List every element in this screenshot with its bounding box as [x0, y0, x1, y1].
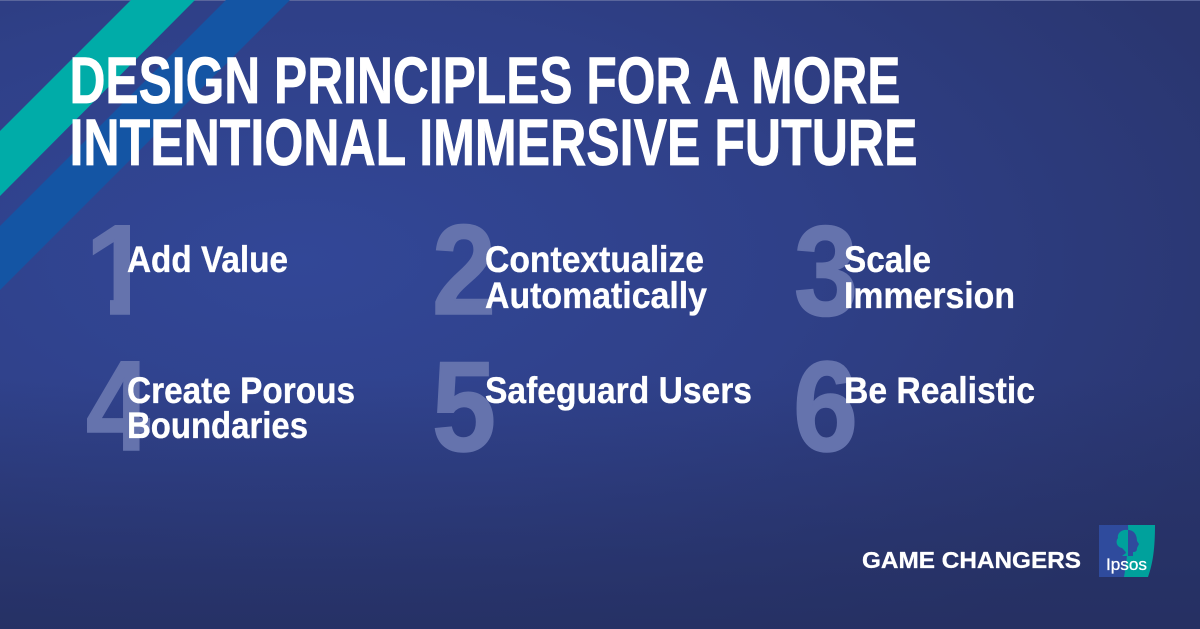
principle 6: Be Realistic	[793, 336, 1035, 479]
principle 1: Add Value: 1	[85, 199, 155, 342]
title	[70, 43, 918, 179]
principle 3: Scale Immersion: Scale	[844, 239, 931, 280]
title: DESIGN PRINCIPLES FOR A MORE	[70, 43, 900, 117]
principle 5: Safeguard Users	[432, 336, 752, 479]
principle 1: Add Value	[92, 225, 287, 315]
title: INTENTIONAL IMMERSIVE FUTURE	[70, 105, 918, 179]
principle 4: Create Porous Boundaries: Create Porous	[127, 370, 355, 411]
icon: Ipsos logo	[1099, 525, 1155, 577]
icon: Ipsos logo: Ipsos	[1106, 555, 1147, 574]
principle 2: Contextualize Automatically: Automatically	[485, 275, 707, 316]
principle 5: Safeguard Users: Safeguard Users	[485, 370, 752, 411]
principle 5: Safeguard Users: 5	[432, 336, 496, 479]
principle 4: Create Porous Boundaries: Boundaries	[127, 405, 308, 446]
principle 1: Add Value: Add Value	[127, 239, 288, 280]
principle 3: Scale Immersion	[794, 200, 1015, 343]
principle 2: Contextualize Automatically	[432, 199, 707, 342]
principle 4: Create Porous Boundaries	[86, 335, 355, 478]
principle 2: Contextualize Automatically: Contextualize	[485, 239, 704, 280]
principle 6: Be Realistic: 6	[793, 336, 858, 479]
principle 2: Contextualize Automatically: 2	[432, 199, 496, 342]
blue diagonal stripe	[0, 0, 290, 290]
brand label: Game Changers: GAME CHANGERS	[862, 547, 1081, 573]
principle 3: Scale Immersion: Immersion	[844, 275, 1015, 316]
principle 6: Be Realistic: Be Realistic	[844, 370, 1035, 411]
principle 4: Create Porous Boundaries: 4	[86, 335, 150, 478]
teal diagonal stripe	[0, 0, 195, 196]
principle 3: Scale Immersion: 3	[794, 200, 858, 343]
